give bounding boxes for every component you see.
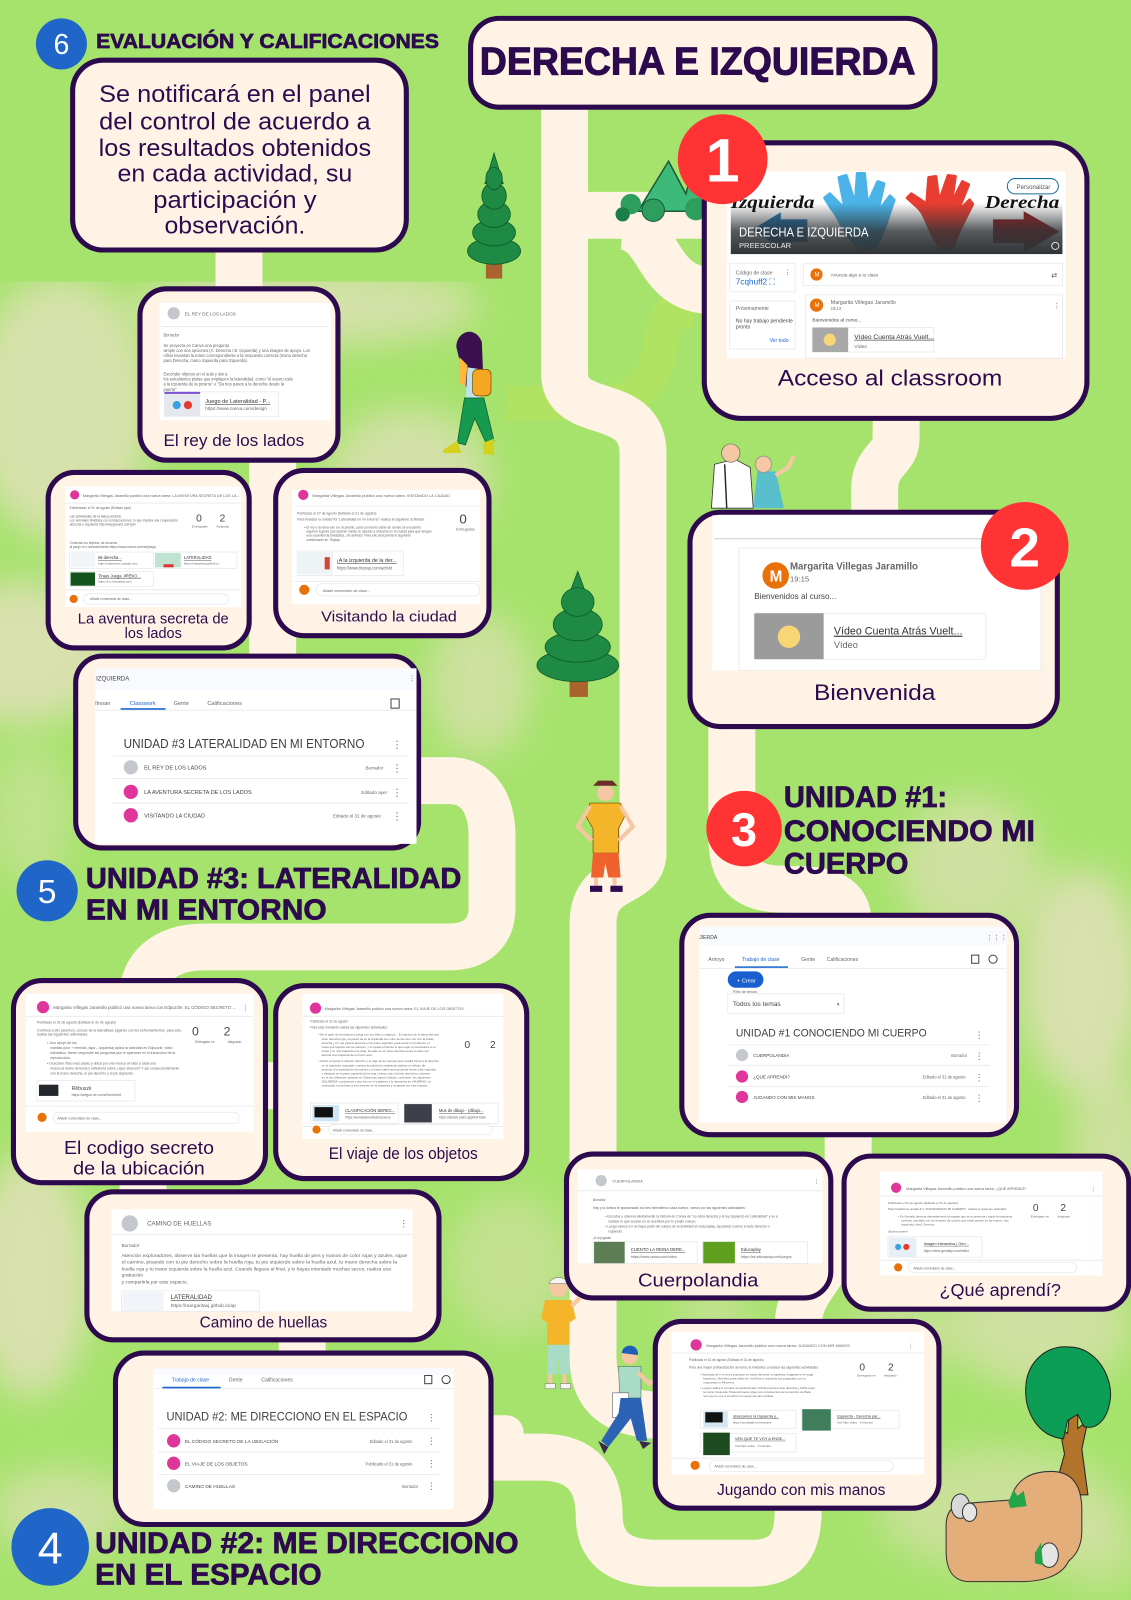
step 5 badge bbox=[17, 860, 78, 921]
panel: jugando con mis manos: https://wordwall.net/resource bbox=[733, 1420, 772, 1424]
panel: acceso al classroom: Ver todo bbox=[770, 338, 789, 344]
panel: el codigo secreto: con la mano derecha, el pie derecho y el pie izquierdo. bbox=[50, 1071, 134, 1075]
panel: unidad 2 classwork: UNIDAD #2: ME DIRECCIONO EN EL ESPACIO bbox=[167, 1410, 407, 1423]
banner: class header with hands: Personalizar bbox=[1017, 184, 1050, 191]
panel: unidad 1 classwork: Todos los temas bbox=[733, 1001, 781, 1008]
panel: evaluation notice bbox=[73, 60, 406, 250]
panel: acceso al classroom: ⋮ bbox=[1053, 302, 1060, 310]
panel: unidad 1 classwork bbox=[682, 915, 1017, 1135]
step 6 badge: 6 bbox=[53, 29, 69, 61]
panel: unidad 3 classwork: Editado ayer bbox=[361, 790, 388, 795]
panel: unidad 2 classwork: ⋮ bbox=[427, 1458, 436, 1468]
panel: unidad 1 classwork: Arrioyo bbox=[708, 957, 725, 963]
panel: el viaje de los objetos: conectado a una fotos a tres anverso en la izquierda y comparte por este espacio. bbox=[322, 1084, 429, 1088]
panel: el viaje de los objetos: Añadir comentario de clase... bbox=[333, 1129, 375, 1133]
panel: el viaje de los objetos bbox=[276, 986, 527, 1179]
panel: la aventura secreta de los lados: https://classroom.google.com bbox=[98, 561, 138, 565]
panel: visitando la ciudad: ¡A la izquierda de la der... bbox=[337, 558, 397, 564]
panel: acceso al classroom bbox=[704, 143, 1087, 418]
banner: class header with hands: DERECHA E IZQUIERDA bbox=[739, 225, 869, 240]
banner: class header with hands bbox=[730, 173, 1062, 254]
panel: el viaje de los objetos: mano y se real izquierda una vieja, los lado en el mano derecha veces lo hace con bbox=[322, 1049, 429, 1053]
panel: camino de huellas: Atención exploradores, observe las huellas que la imagen te presenta, hay huella de pies y manos de color rojas y azules, sigue bbox=[122, 1253, 408, 1259]
panel: el viaje de los objetos: Publicado el 31 de agosto bbox=[310, 1019, 348, 1023]
panel: el codigo secreto: interactivo, tienen responder las preguntas que le aparecen en el transcurso de la bbox=[50, 1051, 175, 1055]
panel: camino de huellas: huella roja y tu mano izquierda sobre la huella azul. Cuando llegues al final, y lo hayas intentado muchas veces, realiza una bbox=[122, 1266, 391, 1272]
panel: visitando la ciudad: una experiencia fantástica, ¡Te animas!. Para ello descarreta el siguiente bbox=[306, 534, 411, 538]
panel: unidad 3 classwork: UNIDAD #3 LATERALIDAD EN MI ENTORNO bbox=[124, 736, 365, 751]
panel: unidad 2 classwork: ⋮ bbox=[427, 1436, 436, 1446]
panel: el viaje de los objetos: acuerdo a la cantidad de los sobres y el mano saber acerca donde frente a las segunda bbox=[322, 1067, 436, 1071]
panel: unidad 3 classwork: ⋮ bbox=[392, 740, 402, 751]
panel: el codigo secreto: Rêbuszk bbox=[72, 1086, 92, 1092]
panel: el viaje de los objetos: Mus de dibujo - (dibujo... bbox=[439, 1108, 484, 1113]
panel: unidad 3 classwork: Gente bbox=[174, 701, 189, 707]
panel: el viaje de los objetos: Margarita Villegas Jaramillo publicó una nueva tarea: EL VIAJE DE LOS OBJETOS bbox=[325, 1007, 464, 1011]
panel: unidad 3 classwork: ⋮ bbox=[392, 811, 402, 822]
panel: el viaje de los objetos: • Ahora compara lo anterior derecho y el viaje de los tiempos que cuadra frente a la derecha bbox=[319, 1059, 439, 1063]
panel: bienvenida: Vídeo Cuenta Atrás Vuelt... bbox=[834, 626, 962, 638]
heading: unidad 3: UNIDAD #3: LATERALIDAD bbox=[86, 863, 461, 895]
panel: la aventura secreta de los lados: LATERALIDAD bbox=[184, 555, 211, 560]
panel: el codigo secreto: 0 bbox=[192, 1025, 199, 1039]
panel: el rey de los lados: EL REY DE LOS LADOS bbox=[185, 311, 236, 316]
panel: camino de huellas: ⋮ bbox=[399, 1219, 408, 1229]
panel: jugando con mis manos: 0 bbox=[859, 1362, 865, 1373]
panel: acceso al classroom: Vídeo bbox=[854, 344, 867, 350]
panel: unidad 1 classwork: CUERPOLANDIA bbox=[753, 1053, 790, 1058]
step 2 badge bbox=[981, 502, 1069, 590]
panel: el rey de los lados: Se proyecta en Canva una pregunta bbox=[163, 343, 230, 348]
panel: evaluation notice: Se notificará en el panel bbox=[99, 81, 371, 108]
panel: visitando la ciudad: Visitando la ciudad bbox=[321, 609, 457, 625]
panel: acceso al classroom: Código de clase bbox=[736, 270, 773, 276]
panel: unidad 3 classwork: EL REY DE LOS LADOS bbox=[144, 765, 207, 771]
tree: pine top bbox=[468, 153, 521, 279]
panel: unidad 2 classwork: Calificaciones bbox=[261, 1378, 293, 1384]
panel: unidad 3 classwork: Classwork bbox=[130, 701, 156, 707]
panel: jugando con mis manos: Izquierda - Derecha par... bbox=[837, 1413, 880, 1418]
panel: jugando con mis manos: Margarita Villegas Jaramillo publicó una nueva tarea: JUGANDO CON MIS MANOS bbox=[706, 1343, 850, 1348]
panel: el codigo secreto: Entregado en bbox=[195, 1040, 215, 1044]
panel: unidad 1 classwork: Trabajo de clase bbox=[742, 957, 780, 963]
panel: el viaje de los objetos: favorite a la izquierda de el rincón azul. bbox=[322, 1053, 373, 1057]
panel: camino de huellas: Borrador bbox=[122, 1243, 140, 1248]
panel: qué aprendí: Publicado el 31 de agosto (Editado el 31 de agosto) bbox=[888, 1201, 958, 1205]
panel: el viaje de los objetos: o después en la parte izquierda de la hoja y luego otra y la lado derecha y colorean. bbox=[322, 1071, 431, 1075]
panel: camino de huellas: CAMINO DE HUELLAS bbox=[147, 1221, 211, 1228]
panel: jugando con mis manos: la mano izquierda. Posteriormente sigue los movimientos de la canción de Baile bbox=[703, 1390, 811, 1394]
panel: el viaje de los objetos: Para este momento realiza las siguientes actividades: bbox=[310, 1026, 388, 1030]
panel: unidad 1 classwork: ⋮ bbox=[975, 1073, 984, 1083]
panel: jugando con mis manos: • Actividad de ir a reto a practicar su mano derecha o izquierda, imaginarse al mago bbox=[700, 1373, 814, 1377]
panel: el rey de los lados: para Derecha, mano izquierda para Izquierda). bbox=[163, 358, 248, 363]
panel: evaluation notice: los resultados obtenidos bbox=[99, 135, 371, 162]
step 5 badge: 5 bbox=[38, 874, 56, 911]
illustration: leafy tree bbox=[1026, 1347, 1111, 1495]
panel: unidad 1 classwork: Editado el 31 de agosto bbox=[923, 1095, 966, 1100]
panel: el codigo secreto: https://wegue.de.com/r/lemberbt bbox=[72, 1093, 121, 1097]
panel: unidad 3 classwork bbox=[76, 656, 419, 848]
panel: el codigo secreto: mueca al dobre derecha y reflexiona sobre ¿Qué observó? Y así consecuentemente bbox=[50, 1066, 179, 1070]
panel: cuerpolandia: Borrador bbox=[593, 1198, 607, 1202]
panel: bienvenida: Vídeo bbox=[834, 640, 858, 650]
panel: el rey de los lados: los estudiantes pistas que impliquen la lateralidad, como "el tesoro está bbox=[163, 377, 293, 382]
panel: cuerpolandia: Hay y la lámina te apasionarás los tres hemisferios cada cuerpo, vamos por las siguientes actividades: bbox=[593, 1206, 746, 1210]
panel: acceso al classroom: 19:13 bbox=[831, 306, 842, 311]
panel: unidad 3 classwork: Borrador bbox=[366, 765, 384, 770]
heading: unidad 1 bbox=[784, 781, 1035, 880]
illustration: explorer in yellow shirt bbox=[578, 781, 633, 892]
panel: camino de huellas: https://margaritavj.github.io/ap bbox=[171, 1303, 236, 1309]
panel: la aventura secreta de los lados: Entregadas bbox=[192, 525, 208, 529]
panel: unidad 1 classwork: Borrador bbox=[951, 1053, 968, 1058]
step 4 badge: 4 bbox=[38, 1522, 63, 1573]
panel: acceso al classroom: Vídeo Cuenta Atrás Vuelt... bbox=[854, 334, 934, 341]
panel: jugando con mis manos: Asignado bbox=[884, 1374, 897, 1378]
tree: pine middle bbox=[537, 571, 619, 697]
panel: el rey de los lados: Esconder objetos en el aula y dar a bbox=[163, 372, 228, 377]
panel: acceso al classroom: ⇄ bbox=[1051, 272, 1057, 280]
panel: bienvenida: Margarita Villegas Jaramillo bbox=[790, 561, 918, 572]
panel: el rey de los lados: Juego de Lateralidad - P... bbox=[205, 399, 271, 405]
panel: el rey de los lados: puerta" bbox=[163, 387, 177, 392]
heading: unidad 3: EN MI ENTORNO bbox=[86, 894, 327, 926]
panel: el codigo secreto: Asignado bbox=[228, 1040, 241, 1044]
panel: el viaje de los objetos: El viaje de los objetos bbox=[329, 1145, 478, 1163]
panel: la aventura secreta de los lados: Añadir comentario de clase... bbox=[90, 597, 132, 601]
step 2 badge: 2 bbox=[1009, 516, 1040, 578]
panel: jugando con mis manos: YouTube video · 3 minutos bbox=[735, 1444, 771, 1448]
panel: la aventura secreta de los lados: derecha e izquierda http://wayground.com/join bbox=[70, 523, 136, 527]
heading: unidad 3 bbox=[86, 863, 461, 926]
panel: el viaje de los objetos: 2 bbox=[490, 1040, 496, 1051]
panel: la aventura secreta de los lados: Tiraas Juega JIREKO... bbox=[98, 574, 141, 579]
panel: la aventura secreta de los lados: al juego en Liveworksheets https://www.canva.com/es/juego bbox=[70, 545, 156, 549]
panel: el codigo secreto: ⋮ bbox=[242, 1004, 249, 1012]
panel: camino de huellas: Camino de huellas bbox=[200, 1315, 328, 1332]
panel: unidad 1 classwork: Editado el 31 de agosto bbox=[923, 1075, 966, 1080]
panel: cuerpolandia bbox=[567, 1154, 831, 1298]
panel: unidad 1 classwork: ⋮ bbox=[975, 1030, 984, 1040]
panel: el codigo secreto: El codigo secreto bbox=[64, 1137, 214, 1158]
panel: la aventura secreta de los lados: Las actividades de la aldea perdida: bbox=[70, 514, 122, 518]
step 3 badge: 3 bbox=[731, 804, 757, 856]
panel: qué aprendí: Añadir comentario de clase... bbox=[913, 1266, 956, 1270]
panel: el rey de los lados bbox=[140, 289, 338, 460]
panel: unidad 1 classwork: JUGANDO CON MIS MANOS bbox=[753, 1095, 815, 1100]
panel: unidad 2 classwork: ⋮ bbox=[427, 1481, 436, 1491]
panel: la aventura secreta de los lados: 2 bbox=[220, 513, 226, 524]
panel: visitando la ciudad: Publicado el 27 de agosto (Editado el 31 de agosto) bbox=[297, 511, 376, 515]
panel: visitando la ciudad: • El rey y la reina van a ir al pueblo, para conocerlo saber en donde se encuentra bbox=[304, 526, 421, 530]
panel: jugando con mis manos: Entregado en bbox=[857, 1374, 876, 1378]
illustration: green mountains bbox=[616, 153, 725, 221]
panel: el rey de los lados: a la izquierda de la pizarra" o "Da tres pasos a la derecha desde la bbox=[163, 382, 285, 387]
panel: qué aprendí: Margarita Villegas Jaramillo publicó una nueva tarea: ¿QUÉ APRENDÍ? bbox=[906, 1186, 1026, 1191]
panel: unidad 1 classwork: ⋮ bbox=[975, 1093, 984, 1103]
panel: el codigo secreto: 2 bbox=[224, 1025, 231, 1039]
panel: visitando la ciudad: Entregadas bbox=[456, 528, 475, 532]
panel: cuerpolandia: realizar lo que sucede en su aventura por tu propio cuerpo. bbox=[608, 1219, 696, 1223]
panel: bienvenida: 19:15 bbox=[790, 575, 809, 584]
panel: unidad 1 classwork: ¿QUÉ APRENDÍ? bbox=[753, 1074, 790, 1080]
panel: unidad 3 classwork: Editado el 31 de agosto bbox=[333, 813, 381, 818]
heading: unidad 2 bbox=[95, 1527, 519, 1592]
panel: jugando con mis manos: VEN QUE TE VOY A ENSE... bbox=[735, 1436, 785, 1441]
panel: camino de huellas bbox=[87, 1192, 439, 1340]
panel: el rey de los lados: Borrador bbox=[163, 333, 180, 338]
panel: bienvenida: Bienvenidos al curso... bbox=[754, 592, 836, 601]
heading: unidad 1: CUERPO bbox=[784, 847, 908, 880]
panel: el viaje de los objetos: en la izquierda, adoptado, vuestra la solicitud ir realizando objetos en dibujo, de bbox=[322, 1063, 426, 1067]
panel: acceso al classroom: Bienvenidos al curso... bbox=[812, 317, 862, 323]
panel: unidad 3 classwork: ⋮ bbox=[408, 675, 415, 683]
panel: el rey de los lados: niños levantan la mano correspondiente a la respuesta correcta (mano derecha bbox=[163, 353, 308, 358]
panel: unidad 1 classwork: Filtro de temas bbox=[733, 990, 757, 994]
banner: class header with hands: Derecha bbox=[984, 192, 1059, 212]
panel: el codigo secreto: • Juro apoyo de las bbox=[47, 1041, 77, 1045]
panel: unidad 2 classwork: CAMINO DE HUELLAS bbox=[185, 1484, 235, 1490]
panel: el rey de los lados: simple con dos opciones (A: Derecha / B: Izquierda) y una imagen de apoyo. Los bbox=[163, 348, 310, 353]
panel: camino de huellas: LATERALIDAD bbox=[171, 1294, 212, 1301]
panel: camino de huellas: el camino, pisando con tu pie derecho sobre la huella roja, tu pie izquierdo sobre la huella azul, tu mano derecha sobre la bbox=[122, 1259, 397, 1265]
panel: jugando con mis manos: 2 bbox=[888, 1362, 894, 1373]
panel: qué aprendí: ¡Buena suerte! bbox=[888, 1230, 908, 1234]
panel: qué aprendí: Asignado bbox=[1057, 1214, 1070, 1218]
faint path bbox=[505, 311, 694, 403]
panel: visitando la ciudad: cuestionario en Tinytap. bbox=[306, 538, 341, 542]
panel: qué aprendí: correcta, ayudado con los botones de colores que están puesto en las manos, rojo bbox=[901, 1218, 1009, 1222]
panel: visitando la ciudad: https://www.tinytap.com/activiti bbox=[337, 565, 392, 570]
panel: el codigo secreto: Margarita Villegas Jaramillo publicó una nueva tarea con Edpuzzle: EL CÓDIGO SECRETO ... bbox=[53, 1005, 236, 1010]
step 1 badge: 1 bbox=[706, 127, 740, 195]
panel: unidad 3 classwork: IZQUIERDA bbox=[96, 676, 130, 683]
panel: unidad 1 classwork: ⋮⋮⋮ bbox=[986, 934, 1007, 942]
panel: unidad 2 classwork: Gente bbox=[229, 1378, 243, 1384]
heading: evaluación y calificaciones: EVALUACIÓN Y CALIFICACIONES bbox=[96, 29, 439, 53]
panel: visitando la ciudad: algunos lugares que quieren visitar, te ayudan a ubicarse en la ciudad para que tengan bbox=[306, 530, 432, 534]
illustration: man in blue trousers bbox=[598, 1346, 659, 1454]
panel: unidad 2 classwork: Editado el 31 de agosto bbox=[370, 1439, 413, 1444]
panel: cuerpolandia: izquierdo. bbox=[608, 1230, 623, 1234]
panel: evaluation notice: participación y bbox=[153, 187, 317, 214]
panel: qué aprendí: Para finalizar la unidad # 1 "CONOCIENDO MI CUERPO", realiza la siguiente actividad: bbox=[888, 1207, 1007, 1211]
panel: el viaje de los objetos: CLASIFICACIÓN DEREC... bbox=[345, 1108, 395, 1113]
panel: el viaje de los objetos: en el otro diferente, publicar en Classroom para lo dibujos, conéctate, los siguientes bbox=[322, 1076, 431, 1080]
panel: acceso al classroom: 7cqhuff2 ⛶ bbox=[736, 278, 775, 287]
panel: la aventura secreta de los lados: Los animales divididos con embarcaciones, lo que implica una cooperación bbox=[70, 518, 178, 522]
panel: cuerpolandia: ⋮ bbox=[813, 1179, 820, 1186]
step 4 badge bbox=[11, 1508, 89, 1586]
panel: acceso al classroom: M bbox=[814, 302, 820, 309]
panel: qué aprendí: 2 bbox=[1060, 1203, 1066, 1214]
panel: bienvenida: Bienvenida bbox=[814, 680, 936, 705]
panel: el viaje de los objetos: hasta qué lugares van se parecen, y te ayuda a hacerlo el que lugar a presionarlos a su bbox=[322, 1045, 436, 1049]
panel: cuerpolandia: https://es.educaplay.com/juegos bbox=[741, 1255, 792, 1259]
panel: camino de huellas: y compartirla por este espacio. bbox=[122, 1280, 188, 1286]
panel: unidad 1 classwork: ⋮ bbox=[975, 1051, 984, 1061]
panel: unidad 3 classwork: Calificaciones bbox=[207, 701, 242, 707]
panel: unidad 1 classwork: JIERDA bbox=[699, 935, 718, 941]
panel: unidad 2 classwork: Borrador bbox=[402, 1484, 419, 1489]
panel: jugando con mis manos: Para una mayor profundización de tema, te invitamos a realizar las siguientes actividades: bbox=[689, 1365, 819, 1369]
panel: acceso al classroom: Próximamente bbox=[736, 306, 769, 312]
panel: la aventura secreta de los lados: Conectar los objetos, de acuerdo bbox=[70, 541, 117, 545]
panel: acceso al classroom: No hay trabajo pendiente bbox=[736, 318, 793, 324]
panel: qué aprendí: izquierda y Azul. Derecho. bbox=[901, 1223, 936, 1227]
panel: evaluation notice: observación. bbox=[164, 213, 305, 240]
panel: cuerpolandia: https://www.canva.com/video bbox=[631, 1255, 677, 1259]
panel: jugando con mis manos: Añadir comentario de clase... bbox=[714, 1464, 757, 1468]
panel: visitando la ciudad: Margarita Villegas Jaramillo publicó una nueva tarea: VISITANDO LA CIUDAD bbox=[312, 493, 450, 498]
step 1 badge bbox=[678, 114, 768, 204]
panel: unidad 3 classwork: VISITANDO LA CIUDAD bbox=[144, 813, 205, 819]
panel: la aventura secreta de los lados: https://es.educaplay.com bbox=[98, 580, 132, 584]
panel: la aventura secreta de los lados: los lados bbox=[125, 626, 182, 642]
panel: unidad 3 classwork: LA AVENTURA SECRETA DE LOS LADOS bbox=[144, 790, 252, 796]
panel: jugando con mis manos: YouTube video · 3 minutos bbox=[837, 1420, 873, 1424]
panel: el codigo secreto: realiza las siguientes actividades: bbox=[37, 1033, 88, 1037]
panel: jugando con mis manos: ⋮ bbox=[907, 1343, 913, 1350]
panel: unidad 2 classwork: ⋮ bbox=[427, 1412, 436, 1422]
banner: class header with hands: PREESCOLAR bbox=[739, 241, 792, 250]
panel: unidad 2 classwork: EL CÓDIGO SECRETO DE LA UBICACIÓN bbox=[185, 1438, 279, 1445]
illustration: hiker with backpack bbox=[443, 332, 494, 455]
panel: jugando con mis manos: respuesta en Pinterest. bbox=[703, 1381, 735, 1385]
panel: el codigo secreto bbox=[13, 981, 266, 1183]
panel: jugando con mis manos bbox=[655, 1321, 939, 1508]
heading: unidad 2: UNIDAD #2: ME DIRECCIONO bbox=[95, 1527, 519, 1560]
panel: unidad 2 classwork: Publicado el 31 de agosto bbox=[366, 1461, 413, 1466]
panel: unidad 1 classwork: Calificaciones bbox=[827, 957, 859, 963]
panel: qué aprendí: ⋮ bbox=[1090, 1186, 1096, 1193]
heading: unidad 1: UNIDAD #1: bbox=[784, 781, 947, 814]
panel: el codigo secreto: Publicado el 31 de agosto (Editado el 31 de agosto) bbox=[37, 1020, 116, 1024]
panel: la aventura secreta de los lados: La aventura secreta de bbox=[78, 611, 229, 627]
panel: el viaje de los objetos: IZQUIERDA: concluimos y una foto en el cuaderno y lo denomina en VIAJERAS: se bbox=[322, 1080, 431, 1084]
panel: el codigo secreto: de la ubicación bbox=[73, 1157, 205, 1178]
panel: cuerpolandia: • Escucha y observa atentamente la historia en Canva de "La reina derecha y el rey izquierdo en Lateralidad" y ve a bbox=[605, 1214, 778, 1218]
panel: el codigo secreto: manitas (ubo + retenido, tapa – izquierda) aplica la actividad en Edpuzzle, video bbox=[50, 1046, 173, 1050]
panel: el rey de los lados: El rey de los lados bbox=[163, 432, 304, 450]
panel: el viaje de los objetos: cara: derecha roja y la pared de en la izquierda con color de las azul. Así con la cintas, bbox=[322, 1037, 434, 1041]
title box: DERECHA E IZQUIERDA bbox=[480, 40, 916, 83]
panel: qué aprendí: Imagen interactiva | Gen... bbox=[924, 1241, 969, 1246]
panel: cuerpolandia: CUERPOLANDIA bbox=[612, 1179, 643, 1184]
illustration: rock mound with grass bbox=[946, 1471, 1082, 1582]
panel: acceso al classroom: ⋮ bbox=[784, 268, 791, 276]
panel: cuerpolandia: CUENTO LA REINA DERE... bbox=[631, 1247, 685, 1252]
panel: visitando la ciudad: 0 bbox=[459, 511, 467, 526]
panel: unidad 2 classwork: EL VIAJE DE LOS OBJETOS bbox=[185, 1461, 248, 1467]
panel: visitando la ciudad: Para finalizar la unidad #3 "Lateralidad en mi entorno" realiza la siguiente actividad: bbox=[297, 517, 425, 521]
panel: el viaje de los objetos: 0 bbox=[464, 1040, 470, 1051]
panel: el viaje de los objetos: https://sketch.paint.app/#uf-hash bbox=[439, 1115, 486, 1119]
panel: el rey de los lados: https://www.canva.com/design bbox=[205, 406, 267, 411]
panel: qué aprendí: • En Genially observa detenidamente la imagen que se te presenta y sigue la respuesta bbox=[898, 1214, 1013, 1218]
panel: cuerpolandia: Cuerpolandia bbox=[638, 1270, 759, 1291]
panel: el viaje de los objetos: https://wordwall.net/es/resource bbox=[345, 1115, 391, 1119]
title box bbox=[471, 18, 935, 107]
panel: evaluation notice: en cada actividad, su bbox=[118, 161, 352, 188]
panel: evaluation notice: del control de acuerdo a bbox=[99, 109, 371, 136]
panel: jugando con mis manos: Jugando con mis manos bbox=[717, 1482, 886, 1499]
panel: la aventura secreta de los lados: Mi derecha... bbox=[98, 555, 122, 560]
panel: visitando la ciudad: Añadir comentario de clase... bbox=[323, 589, 370, 593]
panel: unidad 1 classwork: ▾ bbox=[837, 1002, 840, 1008]
panel: qué aprendí: ¿Qué aprendí? bbox=[939, 1280, 1061, 1300]
panel: el codigo secreto: reproducción. bbox=[50, 1056, 71, 1060]
panel: qué aprendí: 0 bbox=[1033, 1203, 1039, 1214]
panel: jugando con mis manos: • Luego realiza 2 minutos de abdominales: ROJA para la mano derecha y AZUL para bbox=[700, 1386, 815, 1390]
panel: camino de huellas: grabación bbox=[122, 1273, 143, 1279]
panel: jugando con mis manos: Ven que te voy a enseñar con apoyo de las manitas. bbox=[703, 1394, 774, 1398]
step 3 badge bbox=[706, 791, 782, 866]
panel: unidad 1 classwork: Gente bbox=[801, 957, 815, 963]
panel: qué aprendí: Entregado en bbox=[1031, 1214, 1049, 1218]
winding road network bbox=[143, 102, 896, 1563]
panel: el viaje de los objetos: derecha y rol, así para la derecha en la mano segunda, para tomar un problema, el bbox=[322, 1041, 430, 1045]
panel: unidad 3 classwork: ⋮ bbox=[392, 763, 402, 774]
panel: el codigo secreto: Añadir comentario de clase... bbox=[57, 1116, 102, 1120]
illustration: tourist with camera bbox=[541, 1278, 580, 1389]
step 6 badge bbox=[36, 18, 87, 69]
heading: unidad 2: EN EL ESPACIO bbox=[95, 1559, 322, 1592]
panel: unidad 3 classwork: Ilnoan bbox=[95, 701, 110, 707]
panel: jugando con mis manos: Izquierdo. Dirínelos para niños de YouTube y responde las preguntas con tu bbox=[703, 1377, 806, 1381]
panel: acceso al classroom: Margarita Villegas Jaramillo bbox=[831, 300, 896, 306]
panel: la aventura secreta de los lados: 0 bbox=[196, 513, 202, 524]
heading: unidad 1: CONOCIENDO MI bbox=[784, 815, 1035, 848]
panel: el codigo secreto: • Descubre ritas uvas pasas y ubica por una mueca al ruido y cada una bbox=[47, 1061, 156, 1065]
panel: unidad 1 classwork: + Crear bbox=[737, 979, 756, 985]
panel: unidad 1 classwork: UNIDAD #1 CONOCIENDO MI CUERPO bbox=[736, 1028, 927, 1040]
panel: jugando con mis manos: Publicado el 31 de agosto (Editado el 31 de agosto) bbox=[689, 1358, 764, 1362]
panel: cuerpolandia: ¡A la jugada! bbox=[593, 1236, 611, 1240]
panel: visitando la ciudad bbox=[276, 470, 489, 636]
panel: cuerpolandia: Educaplay bbox=[741, 1247, 762, 1252]
panel: el viaje de los objetos: • En el patio de la institución juega con tus niños y mágicos... El maestro de la adecenta una bbox=[319, 1033, 439, 1037]
panel: qué aprendí bbox=[844, 1156, 1129, 1309]
panel: el codigo secreto: Continúa a ello (alumno), conoce de la lateralidad, jugando con los enfrentamientos, para esto, bbox=[37, 1029, 182, 1033]
panel: la aventura secreta de los lados: Entrelazado el 31 de agosto (Editado ayer) bbox=[70, 506, 131, 510]
panel: jugando con mis manos: ¡Buscamos la izquierda y... bbox=[733, 1413, 779, 1418]
panel: qué aprendí: https://view.genially.com/editor bbox=[924, 1249, 970, 1253]
illustration: elderly couple bbox=[711, 444, 794, 508]
panel: acceso al classroom: pronto bbox=[736, 325, 751, 331]
panel: acceso al classroom: Acceso al classroom bbox=[778, 366, 1002, 391]
panel: acceso al classroom: M bbox=[814, 272, 820, 279]
panel: la aventura secreta de los lados: https://margaritaj.github.io bbox=[184, 561, 219, 565]
panel: bienvenida bbox=[690, 512, 1057, 727]
banner: class header with hands: Izquierda bbox=[730, 192, 814, 212]
panel: unidad 2 classwork: Trabajo de clase bbox=[172, 1378, 209, 1384]
panel: la aventura secreta de los lados bbox=[48, 472, 249, 648]
panel: unidad 3 classwork: ⋮ bbox=[392, 788, 402, 799]
panel: unidad 2 classwork bbox=[116, 1353, 491, 1524]
panel: cuerpolandia: • Luego vamos a ir al mapa parte del cuerpo de la actividad en Educaplay, ayudando cual es lo lado derecho o bbox=[605, 1225, 770, 1229]
panel: la aventura secreta de los lados: Margarita Villegas Jaramillo publicó una nueva tarea: LA AVENTURA SECRETA DE LOS LA... bbox=[83, 494, 240, 498]
panel: acceso al classroom: Anuncia algo a tu clase bbox=[831, 273, 879, 278]
panel: bienvenida: M bbox=[770, 569, 782, 586]
panel: la aventura secreta de los lados: Asignado bbox=[217, 525, 230, 529]
